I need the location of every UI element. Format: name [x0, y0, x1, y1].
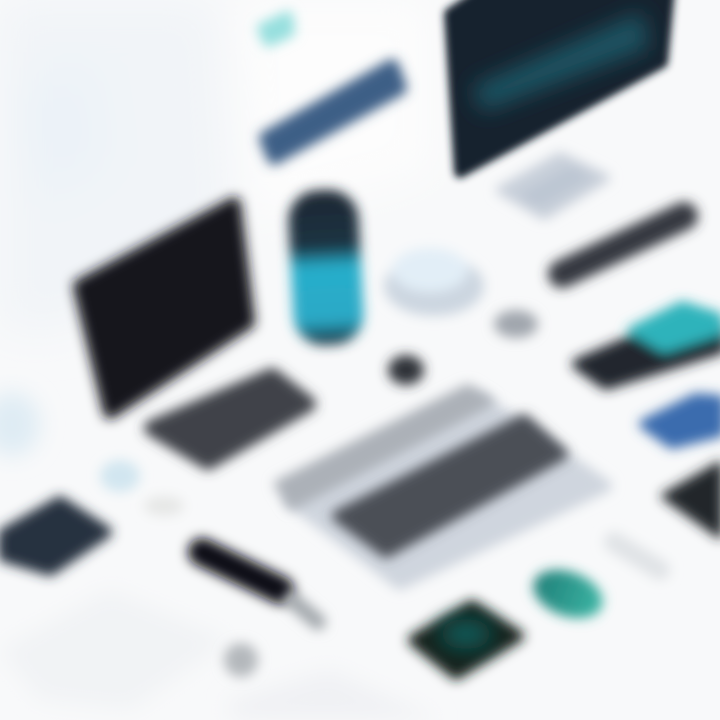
device: dark corner, right [664, 464, 720, 536]
tablet: teal and dark, right [578, 304, 720, 384]
button: small grey [224, 643, 258, 677]
small pale chip: left [144, 496, 184, 516]
laptop: left [80, 204, 308, 462]
laptop base [290, 398, 606, 584]
pale remote: lower right [614, 542, 660, 570]
tablet: dark with teal glow [414, 606, 518, 674]
laptop screen [80, 204, 248, 412]
card: blue, right [644, 398, 720, 444]
device: teal rounded [527, 561, 609, 627]
monitor: top right [450, 0, 670, 216]
monitor stand [500, 156, 606, 216]
monitor screen [450, 0, 670, 172]
icon: teal tag top [262, 16, 290, 42]
laptop keyboard [152, 376, 308, 462]
tablet: dark, lower left [4, 502, 106, 570]
phone: centre [287, 188, 365, 347]
stylus bar: right [562, 216, 684, 274]
stylus: black, lower centre [202, 552, 280, 590]
round device: pale puck [384, 248, 484, 316]
stylus tip: grey [292, 600, 318, 622]
small pale tile: left [100, 460, 140, 492]
small mouse: right centre [494, 310, 538, 338]
pale blue mark: far left [0, 392, 40, 456]
large laptop: centre [278, 388, 606, 584]
small button: centre [388, 355, 424, 385]
background panel: pale sheet bottom [230, 670, 440, 720]
monitor teal display band [476, 16, 646, 108]
background panel: pale sheet lower left [0, 590, 230, 710]
laptop hinge band [278, 388, 490, 506]
laptop keyboard [338, 420, 562, 552]
background panel: pale documents upper left [0, 0, 430, 330]
card: blue bar [266, 66, 400, 158]
